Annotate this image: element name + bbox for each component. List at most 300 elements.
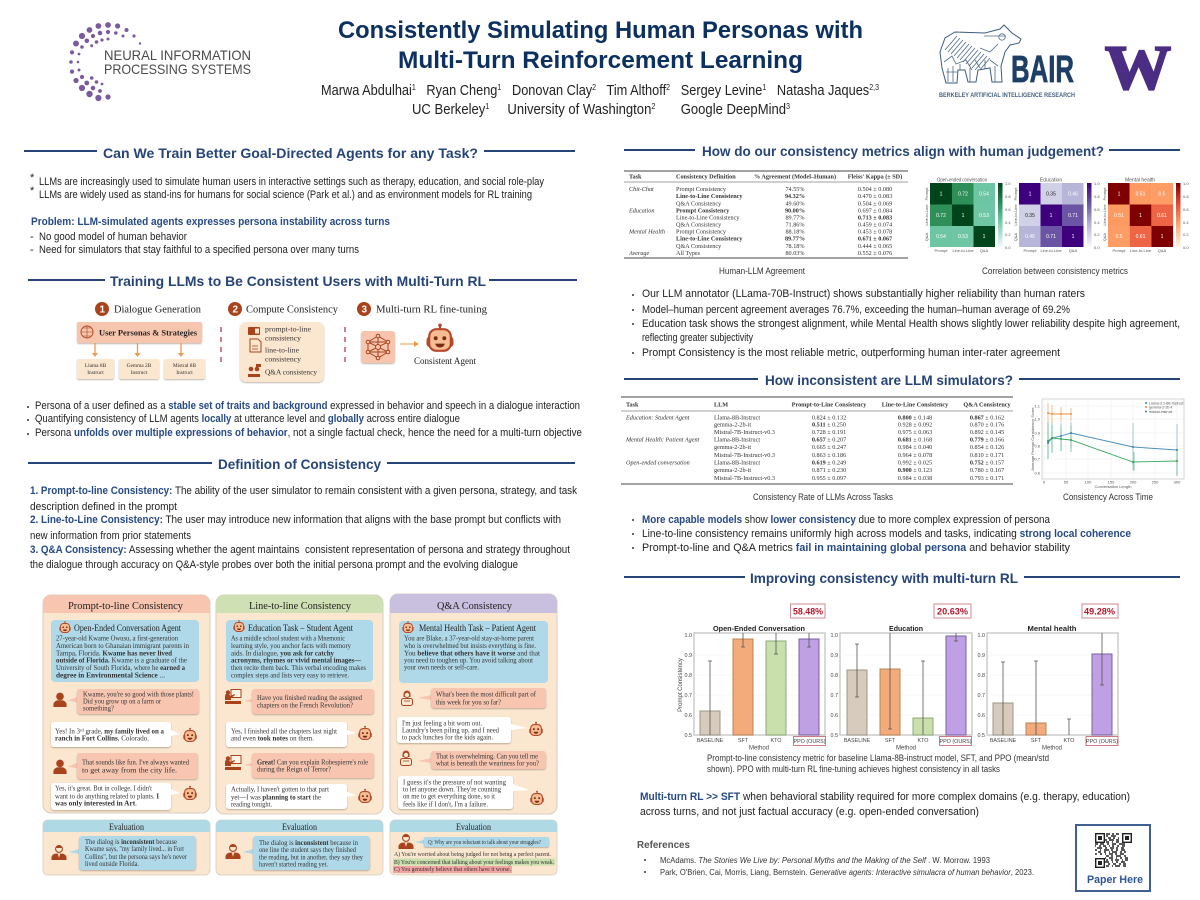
icon: consistent agent robot — [426, 323, 454, 351]
bar chart: open-ended conversation: Open-Ended Conversation — [713, 626, 805, 633]
panel: consistency types: Q&A consistency — [265, 370, 318, 376]
dialogue turn: user remark — [53, 753, 198, 779]
table: human-LLM agreement: Line-to-Line Consistency — [676, 236, 743, 242]
heatmap: open-ended conversation: 1 — [983, 234, 986, 240]
bar chart: open-ended conversation: 0.5 — [684, 733, 692, 739]
panel: evaluation line-to-line: haven't started reading yet. — [259, 862, 328, 868]
affiliations: University of Washington — [489, 102, 651, 118]
bar chart: open-ended conversation: KTO — [771, 738, 781, 744]
heatmap: mental health: Prompt — [1113, 248, 1126, 253]
table: consistency rate of LLMs: 0.681 ± 0.168 — [898, 436, 932, 444]
persona card: Tampa, Florida. Kwame has never lived — [56, 650, 172, 658]
persona card: Open-Ended Conversation Agent — [74, 623, 181, 633]
table: human-LLM agreement: 0.504 ± 0.069 — [858, 200, 892, 208]
bar chart: open-ended conversation: Prompt Consistency — [678, 658, 684, 712]
bar chart: open-ended conversation: SFT — [738, 738, 749, 744]
dialogue turn: patient disclosure: feels like if I don't, I'm a failure. — [403, 802, 488, 808]
text block: consistency definitions: new information from prior statements — [30, 530, 191, 542]
persona card: acronyms, rhymes or vivid mental images— — [231, 658, 361, 664]
bar chart: open-ended conversation: 1.0 — [684, 633, 692, 639]
icon: QR code — [1095, 834, 1131, 867]
line chart: consistency across time: 1.1 — [1034, 404, 1041, 408]
dialogue turn: user question: Did you grow up on a farm or — [83, 698, 162, 706]
heading: Line-to-line Consistency — [249, 600, 351, 612]
table: consistency rate of LLMs: Mistral-7B-Instruct-v0.3 — [714, 429, 775, 436]
text block: introduction: * — [30, 185, 35, 197]
bar chart: education: 0.6 — [830, 713, 838, 719]
table: consistency rate of LLMs: 0.657 ± 0.207 — [812, 436, 846, 444]
text block: consistency definitions: 1. Prompt-to-line Consistency: The ability of the user simulator to remain consistent with a given persona, strategy, and task — [30, 485, 577, 497]
bar chart: mental health: Mental health — [1028, 626, 1076, 633]
heatmap: mental health: 1 — [1161, 234, 1164, 240]
bar chart: mental health: BASELINE — [990, 738, 1017, 744]
text block: consistency definitions: 2. Line-to-Line Consistency: The user may introduce new information that aligns with the base prompt but conflicts with — [30, 514, 561, 526]
text block: agreement findings: Prompt Consistency is the most reliable metric, outperforming human inter-rater agreement — [642, 347, 1060, 359]
heatmap: education: 1 — [1050, 213, 1053, 219]
text block: introduction: - — [30, 244, 34, 256]
table: consistency rate of LLMs: 0.870 ± 0.176 — [970, 422, 1004, 428]
dialogue turn: student contradiction: yet—I was planning to start the — [231, 794, 321, 802]
panel: evaluation Q&A: B) You're concerned that talking about your feelings makes you weak. — [394, 859, 554, 866]
bar chart: mental health: 0.8 — [978, 673, 985, 679]
line chart: consistency across time: 150 — [1108, 480, 1115, 484]
text block: simulator findings — [632, 514, 1131, 554]
text block: introduction: LLMs are increasingly used to simulate human users in interactive settings such as therapy, education, and social role-play — [39, 176, 544, 188]
heatmap: education: 0.46 — [1025, 234, 1035, 240]
text block: persona bullets — [27, 400, 582, 439]
affiliations: Google DeepMind — [655, 102, 786, 118]
panel: evaluation prompt-to-line: Evaluation — [109, 822, 144, 832]
dialogue turn: teacher question: Have you finished reading the assigned — [257, 695, 363, 702]
table: consistency rate of LLMs: 0.892 ± 0.145 — [970, 429, 1004, 436]
panel: evaluation Q&A: Q: Why are you reluctant to talk about your struggles? — [428, 840, 541, 846]
heatmap: education: 0.46 — [1068, 192, 1078, 198]
heatmap: education: 1.0 — [1094, 181, 1100, 186]
table: human-LLM agreement: Prompt Consistency — [676, 186, 727, 193]
persona card: then recite them back. This verbal encoding makes — [231, 665, 366, 672]
table: human-LLM agreement: 0.453 ± 0.078 — [858, 228, 892, 236]
table: human-LLM agreement: Fleiss' Kappa (± SD) — [848, 174, 902, 180]
heatmap: mental health: 0.2 — [1183, 232, 1189, 237]
heatmap: education: Prompt — [1024, 248, 1037, 253]
heatmap: education: Q&A — [1013, 232, 1018, 241]
panel: evaluation prompt-to-line — [43, 820, 210, 875]
text block: simulator findings: Line-to-line consistency remains uniformly high across models and tasks, indicating strong local coherence — [642, 528, 1131, 540]
dialogue turn: teacher question — [225, 689, 374, 714]
dialogue turn: patient reply — [397, 717, 543, 743]
line chart: consistency across time: 1.0 — [1034, 416, 1041, 422]
heatmap: open-ended conversation: 0.6 — [1005, 207, 1011, 212]
dialogue turn: user question: something? — [83, 706, 114, 712]
heatmap: open-ended conversation: 0.53 — [958, 234, 968, 240]
heatmap: mental health: 1 — [1139, 213, 1142, 219]
authors: Sergey Levine — [670, 83, 762, 99]
dialogue turn: therapist follow-up — [400, 750, 546, 769]
heatmap: mental health: 1 — [1118, 192, 1121, 198]
step 1 label — [95, 302, 201, 316]
panel: evaluation prompt-to-line: lived outside Florida. — [85, 861, 139, 868]
heatmap: education: 0.71 — [1068, 213, 1078, 219]
box: Gemma 2B: Gemma 2B — [127, 363, 152, 369]
authors: Ryan Cheng — [416, 83, 497, 99]
authors: Tim Althoff — [596, 83, 667, 99]
dialogue turn: agent reply: grade, — [84, 728, 104, 736]
authors: 2 — [592, 83, 597, 92]
dialogue turn: patient reply: to pack lunches for the kids again. — [402, 734, 493, 742]
dialogue turn: student contradiction — [226, 784, 372, 809]
heatmap: open-ended conversation: 0.72 — [958, 192, 968, 198]
dialogue turn: therapist question — [402, 688, 546, 708]
step 2 label — [228, 302, 338, 316]
dialogue turn: agent reply: rd — [80, 728, 85, 732]
heatmap: open-ended conversation: Prompt — [924, 187, 929, 200]
table: human-LLM agreement: 0.713 ± 0.083 — [858, 214, 892, 222]
text block: agreement findings: reflecting greater subjectivity — [642, 332, 753, 344]
dialogue turn: student reply — [226, 722, 372, 747]
table: human-LLM agreement: 78.18% — [785, 243, 805, 250]
dialogue turn: therapist question: What's been the most difficult part of — [436, 692, 537, 698]
logo: University of Washington W: W — [1105, 34, 1171, 102]
panel: evaluation Q&A: Evaluation — [456, 822, 491, 832]
bar chart: mental health: 0.6 — [978, 713, 985, 719]
panel: evaluation prompt-to-line: Collins", but the persona says he's never — [85, 854, 188, 861]
table: human-LLM agreement: 0.470 ± 0.083 — [858, 193, 892, 200]
bar chart: open-ended conversation: BASELINE — [697, 738, 724, 744]
table: human-LLM agreement: Consistency Definition — [676, 174, 736, 180]
table: human-LLM agreement: 89.77% — [785, 214, 805, 222]
line chart: consistency across time: 100 — [1085, 480, 1092, 484]
line chart: consistency across time: 0.9 — [1034, 430, 1041, 436]
heatmap: education: Line-to-Line — [1013, 204, 1018, 226]
heatmap: education: 0.0 — [1094, 245, 1100, 250]
table: consistency rate of LLMs: 0.928 ± 0.092 — [898, 422, 932, 428]
table: consistency rate of LLMs: 0.900 ± 0.123 — [898, 467, 932, 474]
table: consistency rate of LLMs: 0.810 ± 0.171 — [970, 452, 1004, 459]
table: consistency rate of LLMs: Llama-8B-Instruct — [714, 460, 760, 466]
table: human-LLM agreement: Q&A Consistency — [676, 243, 722, 250]
dialogue turn: agent reply: my family lived on a — [104, 728, 165, 736]
table: consistency rate of LLMs: Llama-8B-Instruct — [714, 436, 760, 444]
text block: introduction: Need for simulators that stay faithful to a specified persona over many turns — [39, 244, 359, 256]
authors: 1 — [762, 83, 767, 92]
dialogue turn: agent contradiction: Yes, it's great. But in college, I didn't — [55, 786, 152, 792]
heatmap: open-ended conversation: 1 — [962, 213, 965, 219]
text block: takeaway: across turns, and not just factual accuracy (e.g. open-ended conversation) — [640, 806, 979, 818]
heatmap: open-ended conversation: 0.2 — [1005, 232, 1011, 237]
bar chart: mental health: PPO (OURS) — [1086, 739, 1118, 745]
box: Llama 8B: Llama 8B — [85, 363, 107, 369]
bar chart: education: 0.5 — [830, 733, 838, 739]
step 3 label: Multi-turn RL fine-tuning — [376, 304, 487, 316]
caption: bar charts: shown). PPO with multi-turn RL fine-tuning achieves highest consistency in all tasks — [707, 764, 1001, 774]
dialogue turn: patient disclosure: I guess it's the pressure of not wanting — [403, 780, 507, 786]
table: consistency rate of LLMs: 0.964 ± 0.078 — [898, 452, 932, 459]
table: consistency rate of LLMs: 0.867 ± 0.162 — [970, 414, 1004, 422]
heatmap: open-ended conversation: Q&A — [924, 232, 929, 241]
table: consistency rate of LLMs: Mistral-7B-Instruct-v0.3 — [714, 452, 775, 459]
heading: Q&A Consistency — [437, 600, 512, 612]
heatmap: mental health: 1.0 — [1183, 181, 1189, 186]
dialogue turn: patient disclosure: on me to get everything done, so it — [403, 794, 495, 800]
line chart: consistency across time: 0.7 — [1034, 456, 1041, 462]
bar chart: open-ended conversation: PPO (OURS) — [793, 739, 826, 745]
text block: introduction: * — [30, 172, 35, 184]
box: Llama 8B — [77, 359, 114, 379]
authors: Natasha Jaques — [766, 83, 869, 99]
text block: consistency definitions: the dialogue through accuracy on Q&A-style probes over both the initial persona prompt and the evolving dialogue — [30, 559, 518, 571]
caption: bar charts: Prompt-to-line consistency metric for baseline Llama-8B-instruct model, SFT, and PPO (mean/std — [707, 753, 1049, 763]
bar chart: mental health: 1.0 — [978, 633, 985, 639]
dialogue turn: student contradiction: reading tonight. — [231, 802, 272, 808]
line chart: consistency across time: 0.8 — [1034, 444, 1041, 448]
table: consistency rate of LLMs: Llama-8B-Instruct — [714, 414, 760, 422]
heatmap: education: 0.6 — [1094, 207, 1100, 212]
step 2 label: Compute Consistency — [246, 304, 338, 316]
table: consistency rate of LLMs: Open-ended conversation — [626, 460, 690, 466]
box: Mistral 8B: Instruct — [176, 370, 193, 376]
table: human-LLM agreement: 0.459 ± 0.074 — [858, 222, 892, 228]
references — [637, 839, 1034, 877]
text block: consistency definitions: 3. Q&A Consistency: Assessing whether the agent maintains consistent representation of persona and strategy throughout — [30, 544, 570, 556]
bar chart: education: 0.7 — [830, 693, 838, 699]
logo: BAIR: BAIR — [1011, 49, 1074, 91]
heatmap: education: 1 — [1072, 234, 1075, 240]
caption: consistency rate: Consistency Rate of LLMs Across Tasks — [753, 492, 894, 502]
box: neural network icon — [361, 331, 395, 363]
table: consistency rate of LLMs: 0.665 ± 0.247 — [812, 444, 846, 451]
heatmap: mental health: 0.4 — [1183, 220, 1189, 225]
panel: line-to-line consistency — [216, 595, 383, 814]
heatmap: education: 0.35 — [1046, 192, 1056, 198]
table: consistency rate of LLMs: 0.824 ± 0.132 — [812, 414, 846, 422]
table: consistency rate of LLMs: 0.975 ± 0.063 — [898, 429, 932, 436]
table: human-LLM agreement: 80.03% — [785, 250, 805, 257]
dialogue turn: therapist question: this week for you so far? — [436, 700, 501, 706]
bar chart: education: 0.8 — [830, 673, 838, 679]
heatmap: mental health: 0.0 — [1183, 245, 1189, 250]
dialogue turn: user question — [53, 689, 199, 714]
affiliations: 2 — [651, 102, 656, 111]
bar chart: mental health: 0.5 — [978, 733, 985, 739]
heatmap: mental health: 0.51 — [1114, 213, 1124, 219]
persona card: aids. In dialogue, you ask for catchy — [231, 650, 335, 658]
table: consistency rate of LLMs — [621, 397, 1013, 484]
heatmap: mental health: 0.8 — [1183, 194, 1189, 199]
heatmap: education: 1 — [1029, 192, 1032, 198]
box: user personas and strategies — [77, 322, 202, 343]
panel: evaluation prompt-to-line: Kwame says, "my family lived... in Fort — [85, 846, 184, 853]
callout: 20.63%: 20.63% — [937, 606, 969, 618]
box: Mistral 8B — [164, 359, 205, 379]
heatmap: education: 0.71 — [1046, 234, 1056, 240]
table: human-LLM agreement: 0.504 ± 0.080 — [858, 186, 892, 193]
dialogue turn: student reply: Yes, I finished all the chapters last night — [231, 728, 337, 736]
step 3 label: 3 — [362, 304, 368, 316]
label: consistent agent: Consistent Agent — [414, 357, 476, 367]
heatmap: mental health: 0.61 — [1157, 213, 1167, 219]
panel: consistency types: consistency — [265, 356, 302, 364]
logo: BAIR: BERKELEY ARTIFICIAL INTELLIGENCE RESEARCH — [939, 93, 1075, 99]
persona card: American born to Ghanaian immigrant parents in — [56, 643, 190, 650]
text block: introduction: No good model of human behavior — [39, 231, 187, 243]
table: human-LLM agreement: Chit-Chat — [629, 186, 654, 193]
table: consistency rate of LLMs: gemma-2-2b-it — [714, 444, 751, 451]
persona card: you need to toughen up. You avoid talking about — [404, 658, 533, 664]
table: consistency rate of LLMs: 0.955 ± 0.097 — [812, 475, 846, 482]
table: consistency rate of LLMs: Mental Health: Patient Agent — [625, 436, 700, 444]
logo: NeurIPS: NEURAL INFORMATION — [104, 47, 251, 63]
diagram: training pipeline — [77, 302, 487, 382]
dialogue turn: user remark: That sounds like fun. I've always wanted — [82, 760, 190, 766]
heatmap: open-ended conversation: 0.54 — [936, 234, 946, 240]
authors: Donovan Clay — [501, 83, 593, 99]
bar chart: mental health — [978, 626, 1118, 752]
heading: metrics vs human judgement: How do our consistency metrics align with human judgement? — [702, 143, 1104, 159]
heatmap: open-ended conversation: Prompt — [935, 248, 948, 253]
authors: 1 — [412, 83, 416, 92]
heatmap: mental health: Line-to-Line — [1102, 204, 1107, 226]
panel: evaluation line-to-line — [216, 820, 383, 875]
heatmap: mental health: 0.6 — [1183, 207, 1189, 212]
heading: improving consistency: Improving consistency with multi-turn RL — [750, 570, 1018, 586]
heatmap: open-ended conversation: 1 — [940, 192, 943, 198]
dialogue turn: teacher follow-up: during the Reign of Terror? — [257, 766, 331, 774]
title: Consistently Simulating Human Personas with — [338, 17, 863, 44]
heatmap: mental health: 0.5 — [1116, 234, 1123, 240]
caption: human-LLM agreement: Human-LLM Agreement — [719, 266, 806, 276]
bar chart: education — [830, 626, 972, 752]
table: consistency rate of LLMs: LLM — [714, 402, 728, 408]
persona card: University of South Florida, where he earned a — [56, 665, 186, 672]
bar chart: education: PPO (OURS) — [939, 739, 972, 745]
panel: evaluation line-to-line: the reading, but in another, they say they — [259, 854, 364, 862]
table: consistency rate of LLMs: 0.984 ± 0.040 — [898, 444, 932, 451]
text block: persona bullets: Persona unfolds over multiple expressions of behavior, not a single factual check, hence the need for a multi-turn objective — [35, 427, 582, 439]
persona card: 27-year-old Kwame Owusu, a first-generation — [56, 636, 179, 642]
bar chart: mental health: Method — [1042, 746, 1062, 752]
heatmap: open-ended conversation: Q&A — [980, 248, 989, 253]
panel: evaluation prompt-to-line: The dialog is inconsistent because — [85, 839, 177, 846]
table: consistency rate of LLMs: Task — [626, 402, 639, 408]
text block: simulator findings: More capable models show lower consistency due to more complex expression of persona — [642, 514, 1051, 526]
dialogue turn: patient reply: I'm just feeling a bit worn out. — [402, 720, 482, 728]
persona card: Education Task – Student Agent — [248, 623, 353, 633]
table: consistency rate of LLMs: 0.800 ± 0.148 — [898, 414, 932, 422]
panel: evaluation line-to-line: Evaluation — [282, 822, 317, 832]
text block: persona bullets: Quantifying consistency of LLM agents locally at utterance level and globally across entire dialogue — [35, 413, 460, 425]
heading: training LLMs: Training LLMs to Be Consistent Users with Multi-Turn RL — [110, 273, 486, 289]
line chart: consistency across time: 0 — [1043, 480, 1046, 484]
dialogue turn: user question: Kwame, you're so good with those plants! — [83, 692, 194, 698]
heatmap: open-ended conversation: Open-ended conversation — [937, 178, 987, 184]
bar chart: education: KTO — [918, 738, 928, 744]
text block: takeaway — [640, 791, 1130, 818]
table: human-LLM agreement: Q&A Consistency — [676, 200, 722, 208]
line chart: consistency across time: Average Prompt Consistency Score — [1030, 407, 1035, 471]
authors: 1 — [497, 83, 502, 92]
title — [338, 17, 863, 74]
heatmap: open-ended conversation: 0.4 — [1005, 220, 1011, 225]
text block: consistency definitions: description defined in the prompt — [30, 501, 177, 513]
table: human-LLM agreement: Prompt Consistency — [676, 228, 727, 236]
persona card: outside of Florida. Kwame is a graduate of the — [56, 658, 187, 664]
references: McAdams. The Stories We Live by: Personal Myths and the Making of the Self . W. Morrow. 1993 — [660, 856, 990, 865]
authors: 2,3 — [869, 83, 879, 92]
table: human-LLM agreement: 89.77% — [785, 236, 805, 242]
heatmap: mental health: 0.61 — [1136, 234, 1146, 240]
table: consistency rate of LLMs: 0.854 ± 0.126 — [970, 444, 1004, 451]
heatmap: open-ended conversation — [924, 178, 1011, 253]
heatmap: education: 0.2 — [1094, 232, 1100, 237]
callout: 58.48%: 58.48% — [793, 606, 824, 618]
heading: goal-directed agents: Can We Train Better Goal-Directed Agents for any Task? — [103, 145, 478, 161]
heatmap: open-ended conversation: 0.8 — [1005, 194, 1011, 199]
text block: agreement findings: Model–human percent agreement averages 76.7%, exceeding the human–human average of 69.2% — [642, 304, 1070, 316]
table: consistency rate of LLMs: 0.619 ± 0.249 — [812, 460, 846, 466]
table: human-LLM agreement: 0.697 ± 0.084 — [858, 208, 892, 214]
panel: consistency types: consistency — [265, 336, 302, 342]
heading: definition of consistency: Definition of Consistency — [218, 456, 381, 472]
callout: 20.63% — [934, 604, 971, 618]
bar chart: education: Education — [889, 626, 923, 633]
dialogue turn: user remark: to get away from the city life. — [82, 768, 177, 774]
table: consistency rate of LLMs: Mistral-7B-Instruct-v0.3 — [714, 475, 775, 482]
heatmap: mental health: Line-to-Line — [1130, 248, 1152, 253]
bar chart: mental health: KTO — [1064, 738, 1074, 744]
dialogue turn: teacher question: chapters on the French Revolution? — [257, 702, 353, 710]
panel: evaluation Q&A — [390, 820, 557, 875]
persona card: who is overwhelmed but insists everything is fine. — [404, 643, 536, 650]
bar chart: education: Method — [896, 746, 916, 752]
persona card — [226, 620, 373, 682]
panel: evaluation Q&A: C) You genuinely believe that others have it worse. — [394, 866, 511, 873]
text block: introduction: LLMs are widely used as stand-ins for humans for social science (Park et al.) and as environment models for RL training — [39, 189, 532, 201]
persona card: degree in Environmental Science ... — [56, 672, 165, 680]
dialogue turn: patient disclosure: to let anyone down. They're counting — [403, 786, 502, 794]
heading: Prompt-to-line Consistency — [68, 600, 183, 612]
table: consistency rate of LLMs: gemma-2-2b-it — [714, 467, 751, 474]
heatmap: mental health: Q&A — [1102, 232, 1107, 241]
dialogue turn: teacher follow-up — [225, 753, 374, 778]
bar chart: education: BASELINE — [844, 738, 871, 744]
heatmap: mental health: 0.5 — [1159, 192, 1166, 198]
box: Llama 8B: Instruct — [87, 370, 104, 376]
table: human-LLM agreement: Q&A Consistency — [676, 222, 722, 228]
heatmap: mental health: 0.51 — [1136, 192, 1146, 198]
bar chart: open-ended conversation — [678, 626, 826, 752]
text block: introduction: Problem: LLM-simulated agents expresses persona instability across turns — [31, 216, 390, 228]
table: human-LLM agreement: Line-to-Line Consistency — [676, 214, 740, 222]
title: Multi-Turn Reinforcement Learning — [398, 47, 803, 74]
heatmap: mental health: Prompt — [1102, 187, 1107, 200]
line chart: consistency across time: Conversation Length — [1095, 484, 1131, 489]
line chart: consistency across time: mistral-instruct — [1149, 410, 1172, 414]
table: human-LLM agreement — [624, 171, 908, 258]
line chart: consistency across time: 200 — [1130, 480, 1137, 484]
line chart: consistency across time: 250 — [1152, 480, 1159, 484]
persona card: your own needs or self-care. — [404, 664, 479, 672]
table: consistency rate of LLMs: Prompt-to-Line Consistency — [792, 402, 867, 408]
bar chart: open-ended conversation: 0.7 — [684, 693, 692, 699]
table: human-LLM agreement: % Agreement (Model–Human) — [754, 174, 836, 180]
table: consistency rate of LLMs: 0.863 ± 0.186 — [812, 452, 846, 459]
arrows: personas to models — [92, 343, 184, 357]
QR code card — [1076, 825, 1150, 891]
label: paper here: Paper Here — [1087, 874, 1143, 886]
heatmap: open-ended conversation: 0.72 — [936, 213, 946, 219]
table: consistency rate of LLMs: 0.511 ± 0.250 — [812, 422, 846, 428]
step 1 label: 1 — [100, 304, 106, 316]
